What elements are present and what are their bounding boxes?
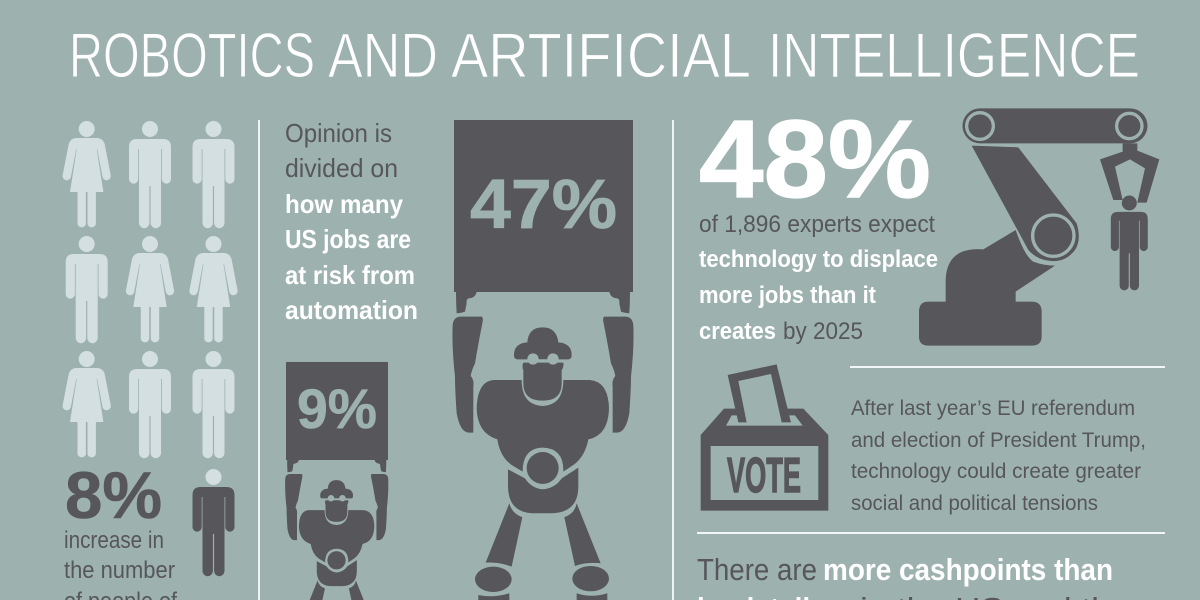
icon: robotic arm lifting person: [919, 108, 1159, 346]
title: ARTIFICIAL: [451, 21, 751, 91]
text: cashpoints: [697, 552, 1130, 600]
icon: highlighted dark person: [192, 469, 234, 576]
text: experts expect: technology to displace: [699, 246, 938, 273]
text: increase in number of people: [64, 527, 177, 600]
title: [69, 21, 1140, 91]
text: EU referendum: and election of President Trump,: [851, 429, 1146, 452]
text: EU referendum: social and political tensions: [851, 492, 1098, 515]
text: opinion is divided: Opinion is: [285, 118, 392, 148]
text: increase in number of people: increase in: [64, 527, 164, 554]
label: 9%: 9%: [297, 377, 377, 440]
text: opinion is divided: at risk from: [285, 260, 415, 290]
icon: ballot box with VOTE: [701, 364, 828, 511]
icon: ballot box with VOTE: VOTE: [727, 449, 801, 503]
title: AND: [328, 21, 438, 91]
title: ROBOTICS: [69, 21, 315, 91]
text: experts expect: [699, 211, 938, 345]
illustration: large robot holding 47% sign: [452, 120, 634, 600]
text: opinion is divided: how many: [285, 189, 403, 219]
text: experts expect: of 1,896 experts expect: [699, 211, 935, 238]
text: experts expect: creates: [699, 318, 776, 345]
icon: grid of light people: [63, 121, 238, 458]
text: EU referendum: technology could create greater: [851, 460, 1141, 483]
text: opinion is divided: US jobs are: [285, 224, 411, 254]
text: experts expect: more jobs than it: [699, 282, 876, 309]
text: EU referendum: [851, 397, 1146, 515]
big number 8%: 8%: [65, 458, 162, 532]
text: experts expect: by 2025: [783, 318, 863, 345]
text: opinion is divided: automation: [285, 295, 418, 325]
illustration: small robot holding 9% sign: [285, 362, 388, 600]
panel: people pictogram: [63, 121, 238, 600]
text: cashpoints: more cashpoints than: [823, 552, 1113, 587]
text: EU referendum: After last year’s EU referendum: [851, 397, 1135, 420]
text: increase in number of people: the number: [64, 557, 175, 584]
text: cashpoints: There are: [697, 552, 817, 587]
text: opinion is divided: divided on: [285, 153, 398, 183]
text: opinion is divided: [285, 118, 418, 325]
big number 48%: 48%: [699, 98, 931, 221]
label: 47%: 47%: [470, 165, 617, 243]
